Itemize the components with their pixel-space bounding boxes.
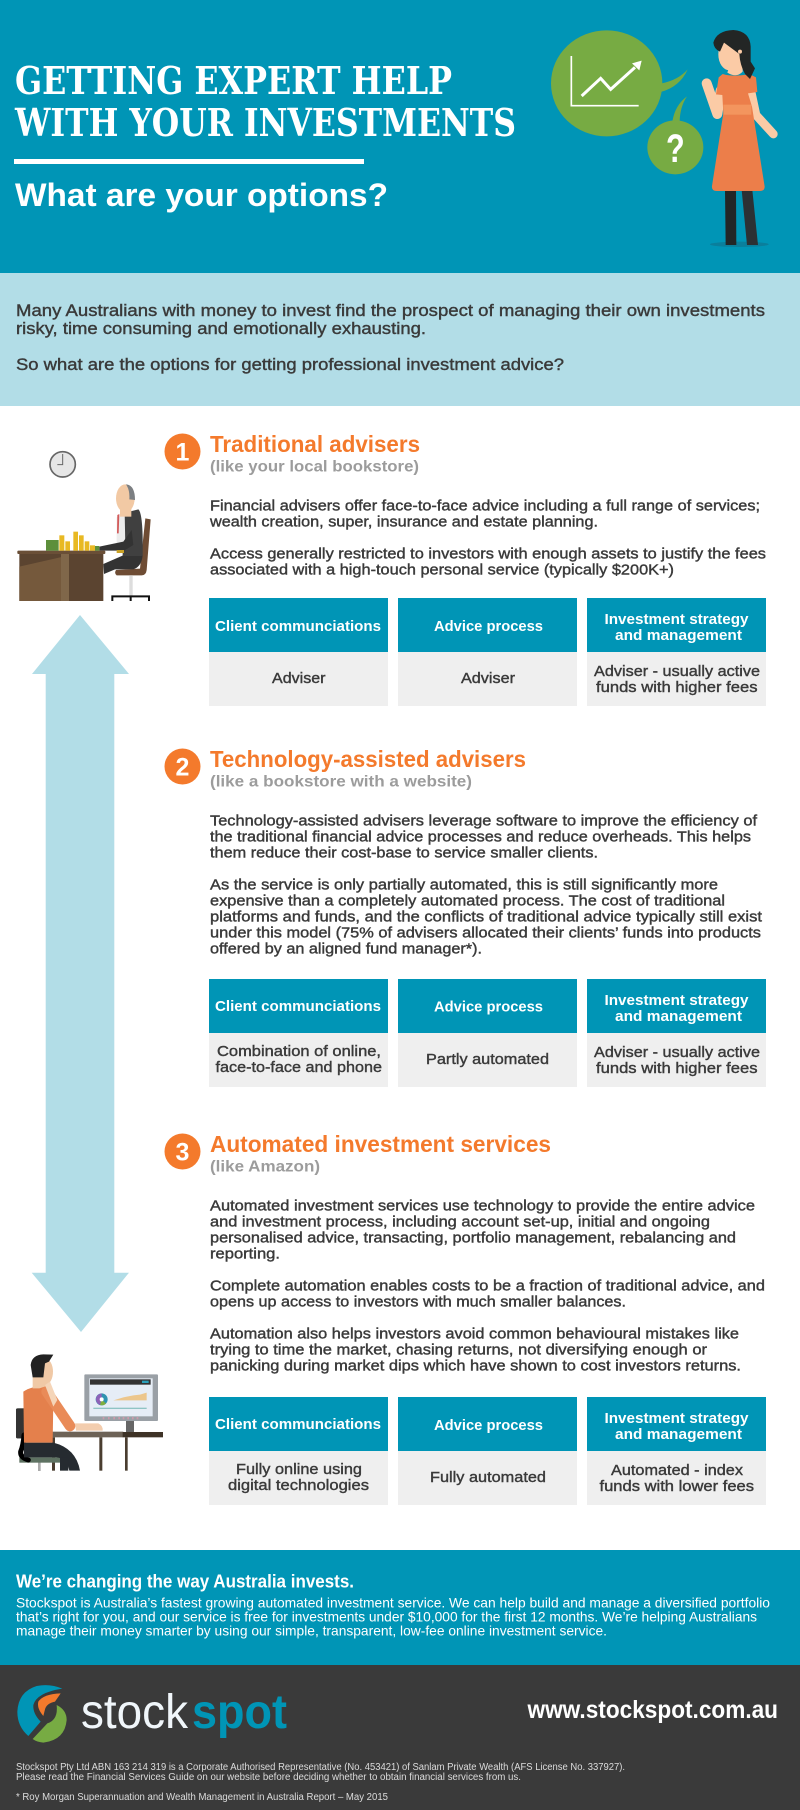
table column: investment strategy: Investment strategy [604, 992, 749, 1009]
panel: footer [0, 1665, 800, 1810]
number badge: 2 [176, 754, 189, 782]
section heading: Technology-assisted advisers [210, 746, 526, 772]
table column: client communications: Adviser [272, 670, 326, 687]
body text: expensive than a completely automated process. The cost of traditional [210, 894, 725, 910]
body text: Technology-assisted advisers leverage software to improve the efficiency of [210, 814, 758, 830]
number badge [164, 748, 200, 784]
body text: wealth creation, super, insurance and estate planning. [209, 515, 598, 531]
body text: trying to time the market, chasing returns, not diversifying enough or [210, 1343, 707, 1359]
number badge [164, 1134, 200, 1170]
illustration: woman with speech bubbles [551, 30, 773, 247]
callout text [16, 1594, 770, 1638]
table column: investment strategy: funds with higher fees [596, 679, 758, 696]
table column: client communications [209, 598, 388, 706]
panel: header [0, 0, 800, 273]
table column: advice process: Advice process [434, 998, 543, 1016]
body text: platforms and funds, and the conflicts of traditional advice typically still exist [210, 910, 762, 926]
table column: client communications: Client communciations [215, 618, 381, 635]
section heading: Automated investment services [210, 1131, 551, 1157]
panel: about stockspot [0, 1550, 800, 1665]
table column: client communications: digital technologies [228, 1477, 369, 1494]
table column: advice process: Advice process [434, 618, 543, 635]
table column: client communications [209, 979, 388, 1087]
logo wordmark: stock [81, 1686, 189, 1739]
body text: Complete automation enables costs to be a fraction of traditional advice, and [210, 1279, 765, 1295]
table column: client communications: Combination of online, [217, 1043, 381, 1060]
illustration: traditional adviser at desk [17, 452, 151, 601]
callout heading: We’re changing the way Australia invests. [16, 1572, 354, 1592]
woman figure [707, 30, 773, 247]
body text: panicking during market dips which have shown to cost investors returns. [210, 1359, 741, 1375]
legal text [16, 1762, 625, 1803]
icon: stockspot mark [17, 1685, 67, 1743]
table column: investment strategy: and management [615, 1008, 742, 1025]
legal text: Please read the Financial Services Guide on our website before deciding whether to obtain financial services from us. [16, 1772, 521, 1783]
title [14, 58, 516, 145]
table column: investment strategy: Adviser - usually active [594, 663, 760, 680]
intro text: So what are the options for getting professional investment advice? [16, 356, 564, 374]
logo [17, 1685, 287, 1743]
body text: and investment process, including account set-up, initial and ongoing [210, 1215, 710, 1231]
number badge: 3 [176, 1138, 189, 1166]
table column: investment strategy: funds with higher fees [596, 1060, 758, 1077]
number badge [164, 434, 200, 470]
table column: client communications [209, 1397, 388, 1505]
intro text: risky, time consuming and emotionally exhausting. [16, 320, 426, 338]
section subheading: (like Amazon) [210, 1158, 320, 1176]
body text: under this model (75% of advisers allocated their clients’ funds into products [210, 926, 761, 942]
body text: Access generally restricted to investors with enough assets to justify the fees [210, 547, 766, 563]
table column: advice process: Fully automated [430, 1469, 546, 1486]
table column: investment strategy: and management [615, 1426, 742, 1443]
table column: client communications: Fully online using [236, 1461, 362, 1478]
body text: associated with a high-touch personal service (typically $200K+) [210, 563, 674, 579]
desk [17, 551, 105, 601]
icon: wall clock [50, 452, 75, 477]
title: GETTING EXPERT HELP [15, 58, 452, 103]
body text: personalised advice, transacting, portfolio management, rebalancing and [210, 1231, 736, 1247]
body text: As the service is only partially automated, this is still significantly more [210, 878, 718, 894]
title: WITH YOUR INVESTMENTS [14, 100, 516, 145]
table column: investment strategy: and management [615, 627, 742, 644]
callout text: that’s right for you, and our service is free for investments under $10,000 for the first 12 months. We’re helping Australians [16, 1608, 757, 1624]
logo wordmark: spot [192, 1686, 287, 1739]
website url: www.stockspot.com.au [527, 1696, 778, 1724]
table column: client communications: Client communciations [215, 1416, 381, 1433]
coins and cash [46, 532, 99, 551]
table column: advice process: Adviser [461, 670, 515, 687]
table column: advice process [398, 1397, 577, 1505]
icon: question speech bubble: ? [666, 127, 685, 171]
man [99, 484, 143, 574]
table column: investment strategy: Automated - index [611, 1462, 744, 1479]
table column: client communications: face-to-face and phone [216, 1059, 382, 1076]
icon: question speech bubble [647, 96, 703, 174]
table column: client communications: Client communciations [215, 998, 381, 1015]
logo wordmark [81, 1686, 287, 1739]
table column: investment strategy [587, 979, 766, 1087]
body text: offered by an aligned fund manager*). [210, 942, 482, 958]
intro text [16, 302, 765, 374]
section subheading: (like a bookstore with a website) [210, 774, 472, 790]
chair [16, 1408, 60, 1471]
table column: investment strategy: Investment strategy [604, 1410, 749, 1427]
table column: advice process [398, 598, 577, 706]
computer monitor [84, 1374, 158, 1432]
title underline [14, 159, 364, 164]
section 3: automated investment services [164, 1131, 766, 1505]
body text: Automated investment services use technology to provide the entire advice [210, 1199, 755, 1215]
body text: the traditional financial advice processes and reduce overheads. This helps [210, 830, 751, 846]
illustration: man at computer [16, 1354, 163, 1471]
body text: reporting. [210, 1247, 280, 1263]
table column: investment strategy: Adviser - usually active [594, 1044, 760, 1061]
body text: opens up access to investors with much smaller balances. [210, 1295, 626, 1311]
desk [52, 1432, 163, 1471]
section subheading: (like your local bookstore) [210, 458, 419, 476]
icon: chart speech bubble [551, 30, 688, 136]
section 2: technology-assisted advisers [164, 746, 766, 1087]
table column: investment strategy [587, 1397, 766, 1505]
table column: investment strategy: funds with lower fees [600, 1478, 754, 1495]
intro text: Many Australians with money to invest find the prospect of managing their own investments [16, 302, 765, 320]
table column: advice process [398, 979, 577, 1087]
section heading: Traditional advisers [210, 431, 420, 457]
callout text: manage their money smarter by using our simple, transparent, low-fee online investment service. [16, 1622, 607, 1638]
arrow: double-headed vertical scale [32, 615, 129, 1332]
body text [210, 814, 762, 958]
table column: advice process: Partly automated [426, 1051, 549, 1068]
number badge: 1 [176, 438, 190, 466]
table column: investment strategy: Investment strategy [604, 611, 749, 628]
legal text: Stockspot Pty Ltd ABN 163 214 319 is a Corporate Authorised Representative (No. 453421) of Sanlam Private Wealth (AFS License No. 337927). [16, 1762, 625, 1773]
table column: advice process: Advice process [434, 1417, 543, 1434]
subtitle: What are your options? [15, 177, 388, 213]
body text [209, 499, 766, 579]
section 1: traditional advisers [164, 431, 766, 706]
chair [112, 518, 151, 601]
body text: Automation also helps investors avoid common behavioural mistakes like [210, 1327, 739, 1343]
legal text: * Roy Morgan Superannuation and Wealth Management in Australia Report – May 2015 [16, 1792, 388, 1803]
body text: them reduce their cost-base to service smaller clients. [210, 846, 598, 862]
body text: Financial advisers offer face-to-face advice including a full range of services; [210, 499, 760, 515]
body text [210, 1199, 765, 1375]
man [23, 1354, 103, 1471]
table column: investment strategy [587, 598, 766, 706]
callout text: Stockspot is Australia’s fastest growing automated investment service. We can help build and manage a diversified portfolio [16, 1594, 770, 1610]
panel: introduction [0, 273, 800, 406]
